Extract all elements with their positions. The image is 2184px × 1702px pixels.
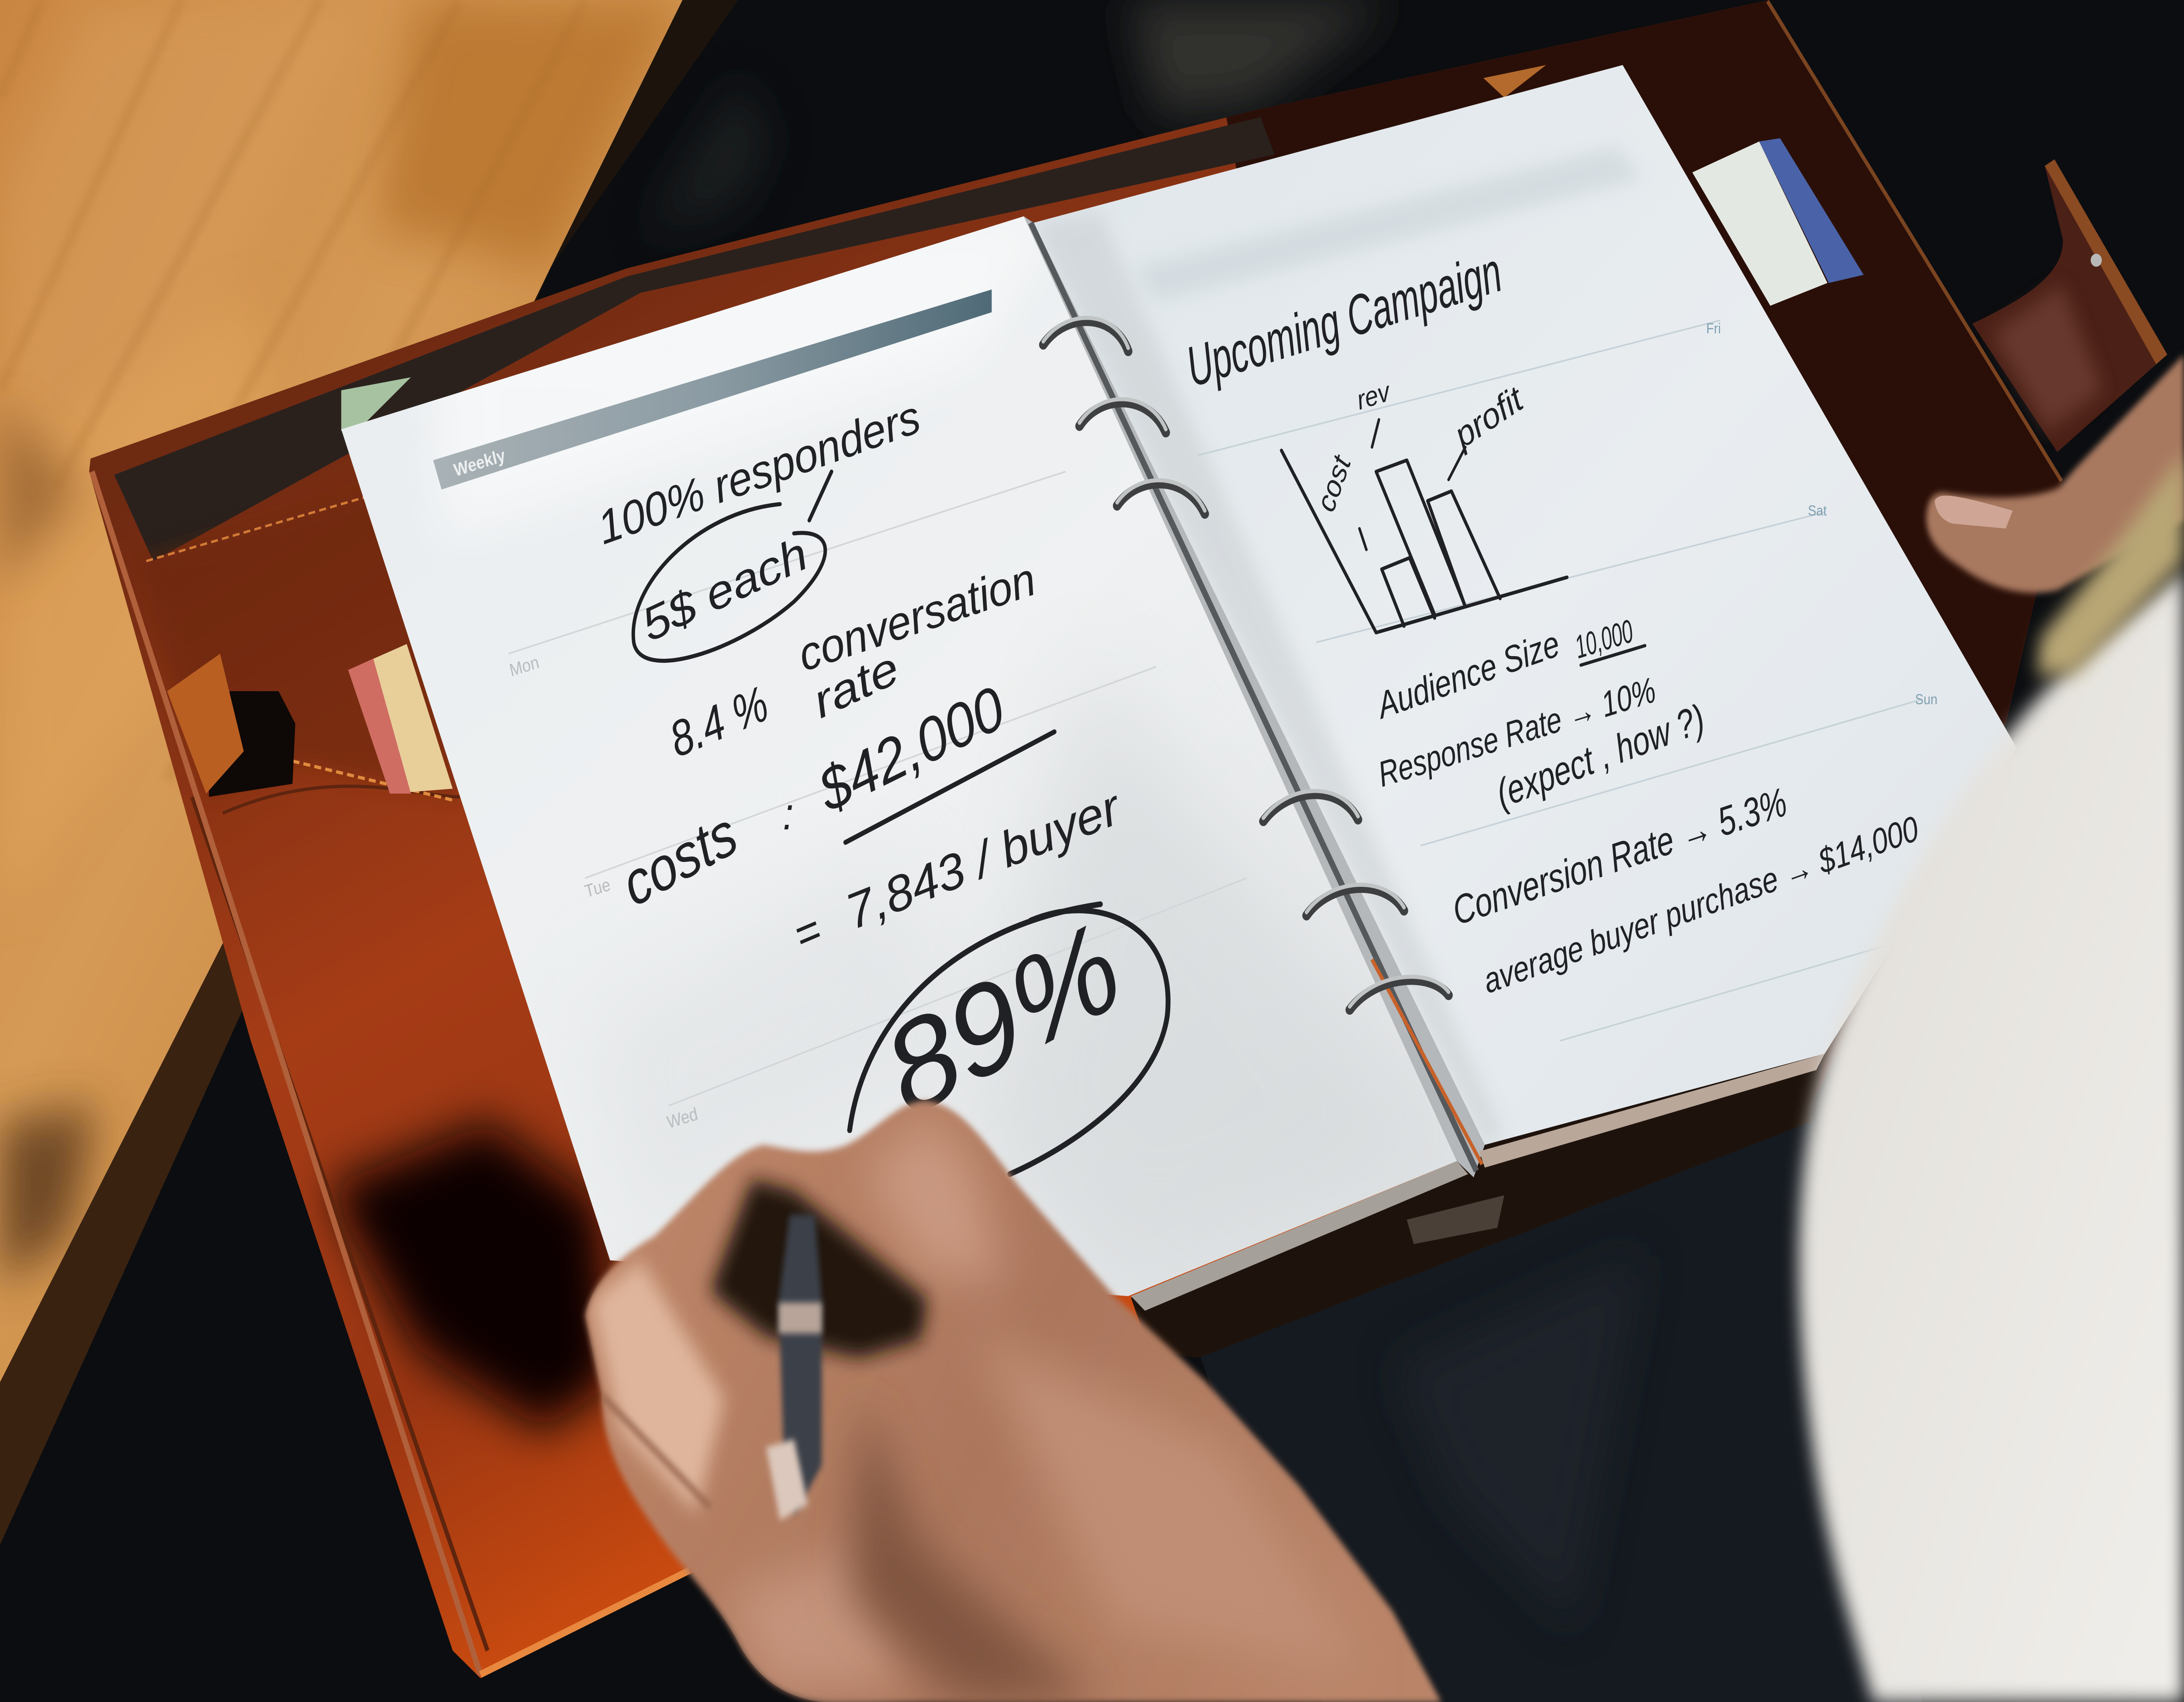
handwriting: left page notes: 7,843 / buyer [840, 778, 1127, 941]
handwriting: campaign metrics [1372, 612, 1922, 1001]
circled note [633, 504, 825, 661]
hand-drawn bar chart [1282, 376, 1567, 633]
rings: bottom set [1263, 791, 1448, 1010]
circled note: 5$ each [636, 527, 814, 652]
right page of notebook: Sun [1915, 691, 1938, 707]
bracelet [2036, 452, 2184, 675]
handwriting: left page notes: 100% responders [593, 390, 926, 555]
handwriting: left page notes: 8.4 % [663, 675, 774, 768]
rings: top set [1043, 318, 1205, 514]
spine backing [1024, 216, 1485, 1177]
handwriting: left page notes: rate [807, 641, 905, 728]
folder: dark right cover [1226, 0, 2063, 1236]
left page of notebook [341, 211, 1457, 1296]
circled result [850, 895, 1168, 1174]
handwriting: left page notes: : [783, 788, 794, 839]
hand-drawn bar chart: cost [1310, 450, 1357, 516]
handwriting: campaign metrics: Conversion Rate → 5.3% [1448, 779, 1791, 934]
handwriting: left page notes: conversation [794, 553, 1040, 681]
pen [766, 1215, 822, 1521]
weekly header bar [433, 290, 992, 489]
day labels: Mon [508, 652, 541, 681]
right bookmark tab [1692, 138, 1864, 306]
finger highlights [592, 1260, 724, 1512]
handwriting: right page title: Upcoming Campaign [1181, 239, 1507, 399]
table: wood surface [0, 0, 738, 1545]
day labels: Wed [665, 1104, 700, 1133]
weekly header bar: Weekly [452, 445, 507, 481]
hand-drawn bar chart: rev [1354, 376, 1394, 416]
hand-drawn bar chart: profit [1448, 378, 1530, 456]
handwriting: left page notes: $42,000 [810, 673, 1013, 825]
handwriting: campaign metrics: Response Rate → 10% [1375, 670, 1659, 795]
spine [1031, 223, 1482, 1171]
right page of notebook: Sat [1808, 502, 1827, 519]
palm shadow [710, 1179, 928, 1358]
floor patch top centre [641, 81, 773, 236]
right hand [1926, 355, 2184, 593]
leather snap cuff [1972, 159, 2167, 452]
folder: shadow on leather [327, 1122, 613, 1431]
handwriting: left page notes: = [788, 902, 827, 963]
right page of notebook: Fri [1706, 320, 1721, 337]
colored tabs [341, 65, 1546, 794]
white garment sleeve [1799, 569, 2184, 1702]
folder: top inner strip [114, 117, 1275, 561]
handwriting: campaign metrics: Audience Size [1372, 622, 1564, 727]
handwriting: left page notes [593, 390, 1168, 1174]
writing hand [585, 1101, 1441, 1702]
day labels: Tue [583, 875, 612, 902]
day labels [508, 652, 700, 1133]
right page of notebook [1033, 65, 2017, 1145]
strap under notebook [1131, 1054, 1825, 1358]
handwriting: left page notes: costs [614, 799, 746, 919]
circled result: 89% [867, 895, 1139, 1144]
page stack bottom edge [1131, 1054, 1825, 1311]
back of hand shading [850, 1398, 1100, 1702]
handwriting: campaign metrics: average buyer purchase → $14,000 [1479, 809, 1922, 1001]
trousers [1198, 1106, 1922, 1702]
handwriting: campaign metrics: 10,000 [1572, 612, 1636, 665]
handwriting: campaign metrics: (expect , how ?) [1492, 696, 1709, 817]
folder strap loop [167, 654, 295, 797]
